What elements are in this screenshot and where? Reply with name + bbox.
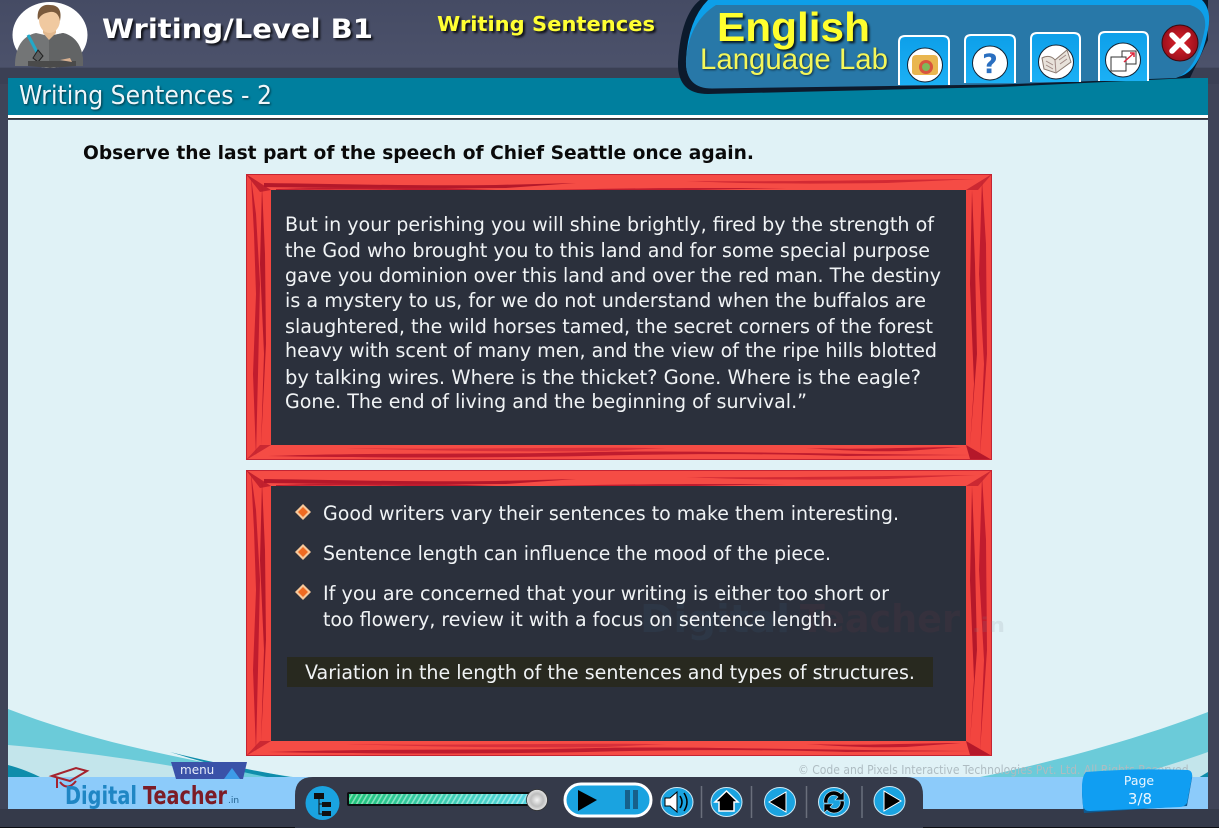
quotation text: is a mystery to us, for we do not understand when the buffalos are xyxy=(285,289,926,312)
bullet 3: too flowery, review it with a focus on sentence length. xyxy=(323,608,838,631)
instruction heading: Observe the last part of the speech of Chief Seattle once again. xyxy=(83,142,754,164)
icon tab: windows xyxy=(1099,32,1148,81)
bullet 1: Good writers vary their sentences to make them interesting. xyxy=(323,502,899,525)
watermark: .in xyxy=(972,613,1005,637)
watermark: Digital xyxy=(640,597,790,641)
icon tab: book xyxy=(1031,33,1080,82)
icon: refresh xyxy=(818,788,850,816)
footer band xyxy=(0,777,1219,828)
icon tab: folder clock xyxy=(899,36,949,85)
menu tab xyxy=(171,762,247,779)
header bar xyxy=(0,0,1219,84)
quotation text: heavy with scent of many men, and the view of the ripe hills blotted xyxy=(285,339,937,362)
brand panel: English Language Lab: English xyxy=(717,4,870,50)
progress slider xyxy=(347,790,548,810)
content panel background xyxy=(8,120,1208,780)
icon: close button xyxy=(1162,25,1198,61)
quotation text: gave you dominion over this land and over the red man. The destiny xyxy=(285,264,941,287)
page indicator: Page xyxy=(1124,773,1154,788)
quotation text: Gone. The end of living and the beginning of survival.” xyxy=(285,390,807,413)
title: Writing/Level B1: Writing/Level B1 xyxy=(102,14,373,45)
brand panel: English Language Lab xyxy=(678,0,1209,94)
play and pause button xyxy=(565,784,651,816)
background waves xyxy=(8,709,1208,778)
highlighted summary: Variation in the length of the sentences and types of structures. xyxy=(305,661,915,684)
section title bar: Writing Sentences - 2 xyxy=(19,81,272,111)
control separators xyxy=(702,786,862,818)
page indicator xyxy=(1082,769,1192,813)
icon: next xyxy=(874,786,905,816)
logo: Digital Teacher xyxy=(52,768,239,810)
logo: Digital Teacher: Teacher xyxy=(143,781,228,810)
watermark: Teacher xyxy=(800,597,960,641)
media control panel xyxy=(295,777,923,828)
brand panel: English Language Lab: Language Lab xyxy=(700,43,888,76)
icon: previous xyxy=(764,788,796,816)
quotation text: But in your perishing you will shine brightly, fired by the strength of xyxy=(285,213,935,236)
icon tab: help xyxy=(965,35,1015,83)
avatar: writer xyxy=(12,2,88,68)
bullet 3 xyxy=(295,582,890,631)
watermark xyxy=(640,597,1005,641)
quotation text xyxy=(285,213,941,413)
icon: speaker xyxy=(661,788,693,816)
section title bar xyxy=(8,78,1208,119)
bullet 2: Sentence length can influence the mood of the piece. xyxy=(323,542,831,565)
quotation text: slaughtered, the wild horses tamed, the secret corners of the forest xyxy=(285,315,933,338)
page indicator: 3/8 xyxy=(1128,790,1152,808)
icon tab: help: ? xyxy=(982,49,998,80)
menu tab: menu xyxy=(180,763,214,777)
logo: Digital Teacher: Digital xyxy=(65,781,137,810)
icon: home xyxy=(711,788,742,816)
bullet 3: If you are concerned that your writing is either too short or xyxy=(323,582,890,605)
quotation text: by talking wires. Where is the thicket? Gone. Where is the eagle? xyxy=(285,366,921,389)
panel: key points xyxy=(246,470,1005,756)
logo: Digital Teacher: .in xyxy=(228,796,239,806)
quotation text: the God who brought you to this land and for some special purpose xyxy=(285,239,930,262)
icon: menu tree xyxy=(306,786,340,820)
panel: speech quotation xyxy=(246,174,992,460)
topic: Writing Sentences: Writing Sentences xyxy=(437,12,655,36)
